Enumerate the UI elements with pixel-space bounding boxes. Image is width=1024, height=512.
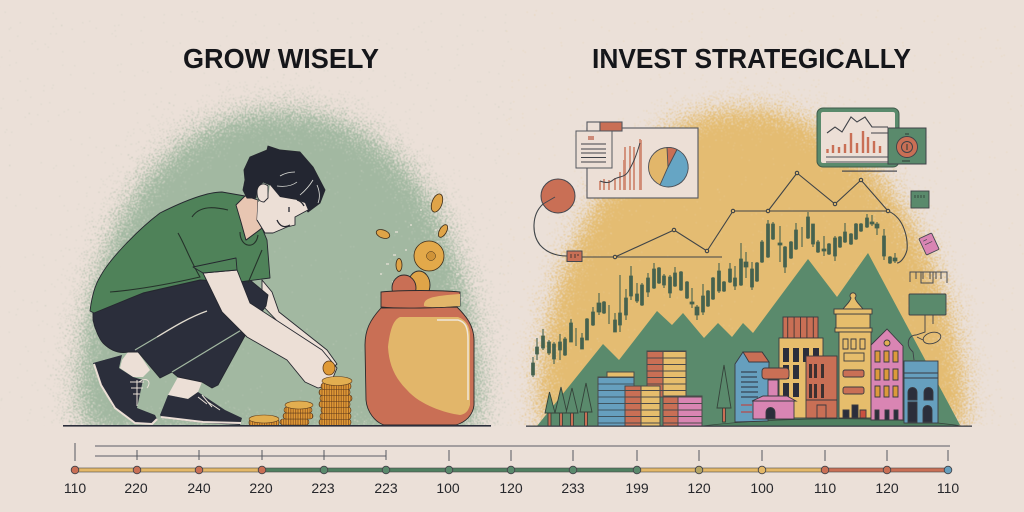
coin in hand xyxy=(323,361,335,375)
coin stacks xyxy=(249,376,352,426)
green shirt xyxy=(90,192,270,313)
blue townhouse xyxy=(904,361,938,423)
face outline xyxy=(257,210,308,233)
pie chart xyxy=(648,147,688,187)
back shoe sole xyxy=(94,364,157,424)
ruler icon xyxy=(910,272,947,283)
timeline labels: 120 xyxy=(687,480,711,496)
bar chart xyxy=(600,139,641,190)
timeline labels: 110 xyxy=(937,480,959,496)
timeline labels: 223 xyxy=(311,480,335,496)
pink cottage xyxy=(752,396,796,419)
timeline labels: 110 xyxy=(64,480,86,496)
short stack xyxy=(280,401,313,425)
jar xyxy=(365,271,474,425)
shoe laces xyxy=(130,380,220,410)
front leg sock xyxy=(168,377,202,399)
blue block xyxy=(598,372,634,426)
town buildings xyxy=(735,293,938,423)
near arm xyxy=(203,270,337,388)
title: grow wisely: GROW WISELY xyxy=(183,43,379,74)
small coin 3 xyxy=(375,228,391,240)
trees xyxy=(545,365,731,426)
pink townhouse xyxy=(871,329,903,420)
sparkles xyxy=(380,210,459,282)
smile and eye xyxy=(277,200,304,227)
tall tree xyxy=(717,365,731,422)
ground hill xyxy=(702,419,962,426)
timeline labels: 220 xyxy=(249,480,273,496)
document xyxy=(576,131,612,168)
trouser inner seam xyxy=(172,329,243,372)
trouser crease xyxy=(157,311,207,337)
red circle node xyxy=(541,179,575,213)
timeline labels: 110 xyxy=(814,480,836,496)
orange and pink block xyxy=(663,396,702,426)
person crouching xyxy=(90,146,337,425)
blue house xyxy=(735,352,769,422)
yellow clock tower xyxy=(834,293,872,418)
hair xyxy=(243,146,325,212)
timeline labels: 233 xyxy=(561,480,585,496)
trousers xyxy=(93,280,268,388)
orange and yellow tower xyxy=(647,351,686,397)
tree 4 xyxy=(580,383,592,426)
timeline ticks xyxy=(75,443,948,461)
flat coin xyxy=(249,415,279,426)
front shoe xyxy=(160,392,242,425)
green sign with cord xyxy=(908,294,946,360)
small coin 1 xyxy=(429,192,445,214)
front shoe sole xyxy=(161,417,241,423)
mountains xyxy=(537,253,960,426)
timeline labels: 120 xyxy=(875,480,899,496)
face xyxy=(257,185,308,233)
timeline labels: 120 xyxy=(499,480,523,496)
stippled yellow backdrop xyxy=(537,108,968,440)
timeline bracket lines xyxy=(95,446,950,456)
yellow apartment xyxy=(779,317,823,418)
hair highlights xyxy=(277,172,319,203)
trend line network xyxy=(534,171,907,263)
title: invest strategically: INVEST STRATEGICALLY xyxy=(592,43,911,74)
back leg sock xyxy=(120,352,150,377)
trend curve xyxy=(600,143,640,182)
striped buildings xyxy=(598,351,702,426)
tall stack xyxy=(319,376,352,426)
jar yellow glass xyxy=(388,317,470,415)
jar neck highlight xyxy=(424,294,460,307)
back shoe xyxy=(93,355,157,424)
falling coins xyxy=(375,192,450,272)
small red box xyxy=(567,251,582,262)
sign tower xyxy=(762,368,789,398)
left ground line xyxy=(63,425,491,427)
timeline xyxy=(64,443,959,496)
green safe panel xyxy=(888,128,926,164)
red apartment xyxy=(806,356,837,418)
shirt folds xyxy=(110,208,262,292)
monitor stand xyxy=(842,170,897,172)
trouser highlights xyxy=(135,337,157,350)
monitor bars xyxy=(828,131,880,153)
timeline labels: 240 xyxy=(187,480,211,496)
curved connector to red circle xyxy=(534,197,567,256)
presentation panel xyxy=(576,122,698,198)
shirt sleeve cuff xyxy=(193,258,237,273)
right ground line xyxy=(526,426,972,427)
tab xyxy=(587,122,622,131)
timeline nodes xyxy=(71,466,952,474)
coins in jar opening xyxy=(392,271,430,301)
tree 2 xyxy=(555,387,567,426)
timeline track xyxy=(75,468,948,472)
timeline labels: 100 xyxy=(750,480,774,496)
timeline labels xyxy=(64,480,959,496)
neck xyxy=(236,196,262,240)
orange and yellow block xyxy=(625,386,660,426)
large coin xyxy=(414,241,444,271)
pink card xyxy=(919,233,939,255)
tree 1 xyxy=(545,392,555,426)
jar neck xyxy=(381,290,460,308)
candlestick chart xyxy=(532,212,897,377)
stippled green backdrop xyxy=(77,110,482,440)
timeline labels: 100 xyxy=(436,480,460,496)
timeline labels: 199 xyxy=(625,480,649,496)
tree 3 xyxy=(566,388,578,426)
far arm xyxy=(262,280,337,372)
monitor line chart xyxy=(827,117,888,133)
small coin 2 xyxy=(436,223,450,239)
timeline labels: 220 xyxy=(124,480,148,496)
small green square xyxy=(911,191,929,208)
timeline labels: 223 xyxy=(374,480,398,496)
small coin 4 xyxy=(396,258,402,272)
monitor baselines xyxy=(826,157,888,162)
monitor xyxy=(817,108,899,172)
jar shine xyxy=(437,320,468,400)
board xyxy=(587,128,698,198)
jar body xyxy=(365,307,474,425)
ear xyxy=(257,184,268,202)
